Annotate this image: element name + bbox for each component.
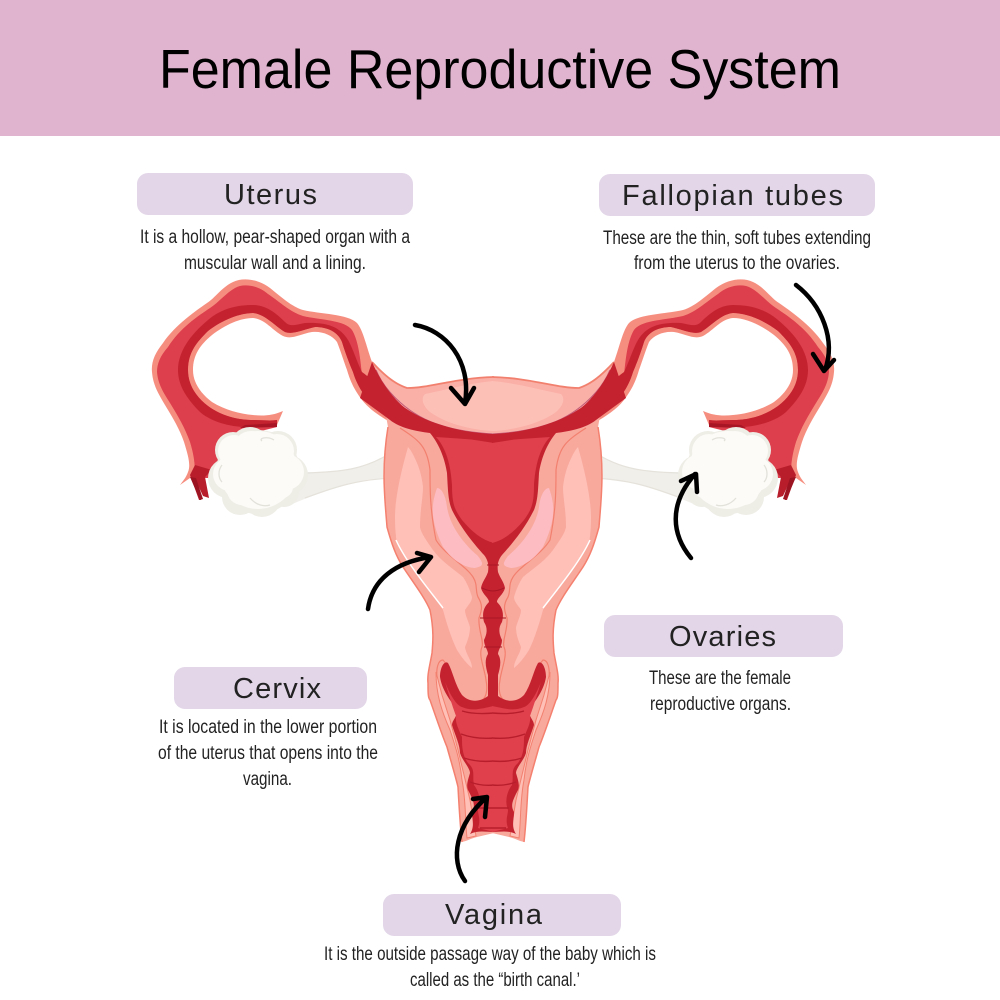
panel: uterus <box>137 173 413 274</box>
vagina heading: Vagina <box>445 899 543 931</box>
panel: cervix <box>158 667 378 790</box>
fallopian tubes text <box>603 228 871 274</box>
fallopian tubes label pill <box>599 174 875 216</box>
ovaries label pill <box>604 615 843 657</box>
arrow: to fallopian tube <box>796 285 834 371</box>
vagina label pill <box>383 894 621 936</box>
fallopian tubes text: from the uterus to the ovaries. <box>634 253 840 274</box>
vagina text <box>324 944 656 991</box>
cervix text: vagina. <box>243 769 292 790</box>
title: Female Reproductive System <box>159 38 841 100</box>
uterus text: muscular wall and a lining. <box>184 253 366 274</box>
ovaries text: reproductive organs. <box>650 694 791 715</box>
uterus heading: Uterus <box>224 179 317 211</box>
vagina text: called as the “birth canal.’ <box>410 970 580 991</box>
panel: fallopian tubes <box>599 174 875 274</box>
vagina text: It is the outside passage way of the baby which is <box>324 944 656 965</box>
cervix label pill <box>174 667 367 709</box>
right fallopian tube, ovary and half of uterus <box>492 279 834 842</box>
title banner <box>0 0 1000 136</box>
arrow: to vagina <box>457 797 487 881</box>
anatomy diagram <box>152 279 834 842</box>
ovaries text <box>649 668 791 715</box>
arrow: to cervix <box>368 553 431 609</box>
panel: ovaries <box>604 615 843 715</box>
arrow: to uterus <box>415 325 474 404</box>
arrow: to ovary <box>676 474 697 558</box>
left fallopian tube, ovary and half of uterus <box>152 279 494 842</box>
cervix text: It is located in the lower portion <box>159 717 377 738</box>
ovaries heading: Ovaries <box>669 621 776 653</box>
cervix text <box>158 717 378 790</box>
uterus text: It is a hollow, pear-shaped organ with a <box>140 227 410 248</box>
panel: vagina <box>324 894 656 991</box>
uterus label pill <box>137 173 413 215</box>
cervix text: of the uterus that opens into the <box>158 743 378 764</box>
ovaries text: These are the female <box>649 668 791 689</box>
uterus text <box>140 227 410 274</box>
fallopian tubes text: These are the thin, soft tubes extending <box>603 228 871 249</box>
fallopian tubes heading: Fallopian tubes <box>622 180 843 212</box>
cervix heading: Cervix <box>233 673 322 705</box>
